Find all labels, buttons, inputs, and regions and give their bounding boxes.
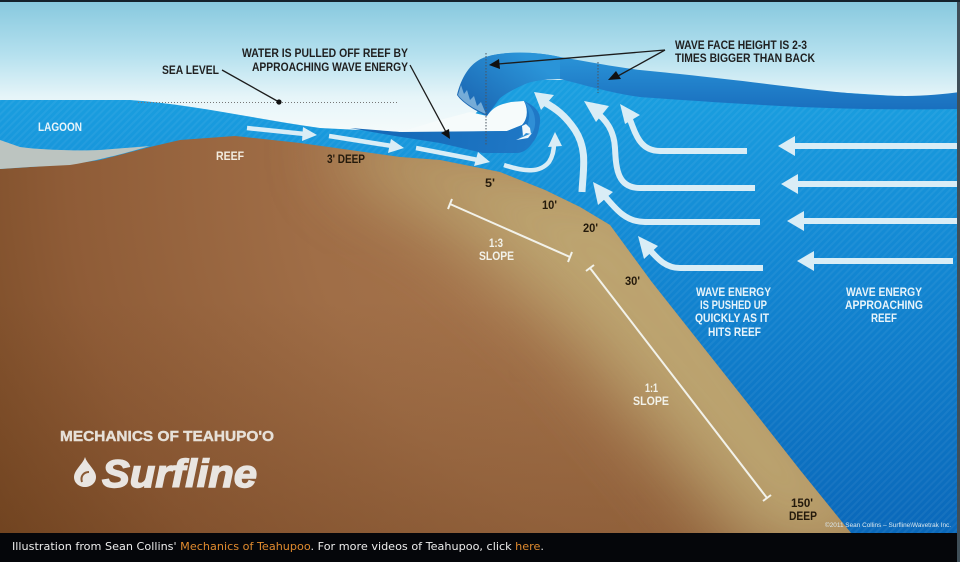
barrel inner face	[517, 101, 535, 140]
top edge line	[0, 0, 960, 2]
arrow: reef flow 2	[329, 136, 404, 153]
label: wave energy approaching: APPROACHING	[845, 300, 923, 312]
sky	[0, 0, 960, 135]
label: wave energy pushed up: IS PUSHED UP	[700, 300, 767, 312]
label: 1:3 slope	[479, 238, 514, 263]
label: wave energy approaching	[845, 287, 923, 325]
label: 1:3 slope: SLOPE	[479, 251, 514, 263]
wave lip	[457, 53, 560, 116]
label: depths: 10'	[542, 200, 557, 212]
wave back and face	[470, 53, 960, 116]
label: water pulled off reef: WATER IS PULLED OFF REEF BY	[242, 48, 408, 60]
lagoon sand	[0, 140, 150, 169]
scale: 1:3 slope	[448, 199, 572, 262]
wave height dotted markers	[486, 53, 598, 145]
scale: 1:1 slope	[586, 265, 771, 501]
pointer: water pulled off reef	[410, 65, 450, 139]
label: wave energy approaching: WAVE ENERGY	[846, 287, 922, 299]
icon: water drop	[74, 457, 96, 487]
arrow: large rising into wave	[534, 92, 584, 192]
label: wave energy pushed up: HITS REEF	[708, 327, 761, 339]
right edge strip	[957, 0, 960, 562]
arrow: approaching 3	[787, 211, 957, 231]
arrow: small curl	[504, 132, 562, 170]
arrow: curved up A	[620, 104, 747, 151]
title: MECHANICS OF TEAHUPO'O	[60, 429, 274, 445]
wave trough	[350, 101, 540, 153]
barrel opening	[400, 101, 527, 132]
arrow: curved up B	[584, 101, 755, 188]
label: reef: REEF	[216, 151, 244, 163]
label: water pulled off reef	[242, 48, 408, 74]
label: depths: 5'	[485, 178, 495, 190]
arrow: curved up C	[593, 182, 760, 222]
label: wave face height: WAVE FACE HEIGHT IS 2-3	[675, 40, 807, 52]
arrow: approaching 2	[781, 174, 957, 194]
caption bar	[0, 533, 960, 562]
label: wave energy pushed up: QUICKLY AS IT	[695, 313, 769, 325]
label: depths: 30'	[625, 276, 640, 288]
surfer	[516, 124, 532, 140]
pointer: sea level	[222, 70, 282, 105]
lip foam streaks	[458, 85, 486, 114]
label: depths: 150'	[791, 498, 813, 510]
label: lagoon: LAGOON	[38, 122, 82, 134]
label: wave energy pushed up	[695, 287, 771, 339]
label: sea level: SEA LEVEL	[162, 65, 219, 77]
arrow: reef flow 3	[416, 148, 490, 166]
caption text: Illustration from Sean Collins' Mechanics of Teahupoo. For more videos of Teahupoo, click here.	[12, 540, 544, 553]
label: depths: 20'	[583, 223, 598, 235]
arrow: reef flow 1	[247, 127, 317, 141]
label: wave face height: TIMES BIGGER THAN BACK	[675, 53, 816, 65]
sea level dotted line	[138, 102, 397, 104]
label: 1:1 slope	[633, 383, 669, 408]
label: wave face height	[675, 40, 816, 65]
label: 1:1 slope: 1:1	[645, 383, 658, 395]
energy arrows	[247, 92, 957, 271]
pointer: wave face height	[489, 50, 665, 80]
arrow: approaching 4	[797, 251, 953, 271]
label: depths	[327, 154, 817, 523]
label: wave energy pushed up: WAVE ENERGY	[696, 287, 771, 299]
seabed ground	[0, 136, 851, 533]
copyright: ©2011 Sean Collins – Surfline\Wavetrak Inc.	[825, 522, 951, 529]
logo: Surfline: Surfline	[102, 453, 257, 496]
label: 1:1 slope: SLOPE	[633, 396, 669, 408]
label: depths: DEEP	[789, 511, 817, 523]
label: depths: 3' DEEP	[327, 154, 365, 166]
arrow: curved up D	[638, 236, 763, 268]
label: 1:3 slope: 1:3	[489, 238, 503, 250]
arrow: approaching 1	[778, 136, 957, 156]
label: wave energy approaching: REEF	[871, 313, 897, 325]
label: water pulled off reef: APPROACHING WAVE ENERGY	[252, 62, 408, 74]
